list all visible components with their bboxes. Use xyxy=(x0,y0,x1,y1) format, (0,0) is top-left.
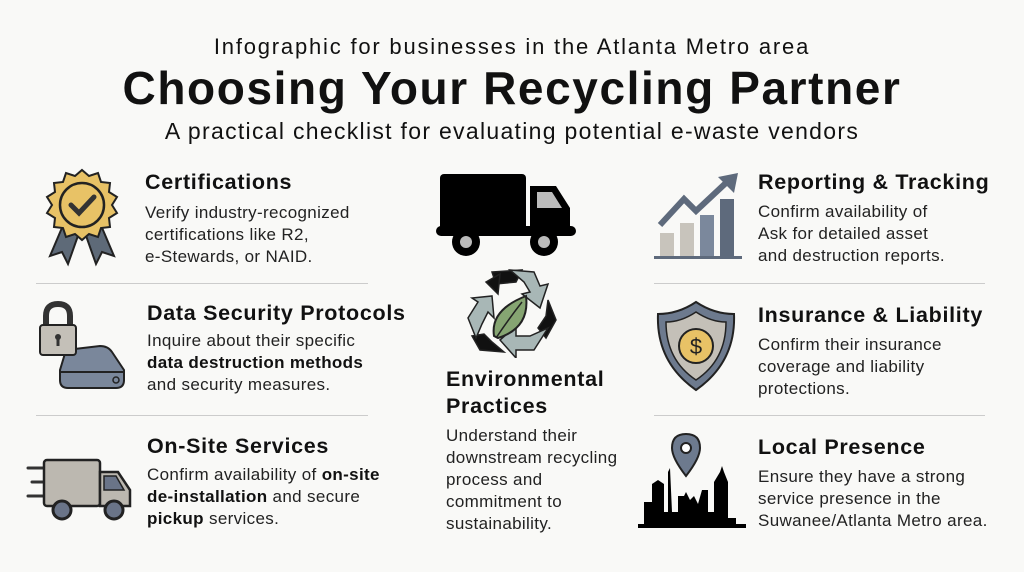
panel: on-site services xyxy=(26,434,380,528)
heading: Local Presence xyxy=(758,435,926,459)
text xyxy=(145,203,350,266)
icon: city skyline with pin xyxy=(638,433,746,528)
text: data destruction methods xyxy=(147,353,363,372)
text xyxy=(758,335,942,398)
text: service presence in the xyxy=(758,489,941,508)
text: sustainability. xyxy=(446,514,552,533)
heading: Reporting & Tracking xyxy=(758,170,989,194)
text: Inquire about their specific xyxy=(147,331,355,350)
heading: Environmental xyxy=(446,367,604,391)
text: de-installation and secure xyxy=(147,487,360,506)
text: Suwanee/Atlanta Metro area. xyxy=(758,511,988,530)
text: Ensure they have a strong xyxy=(758,467,965,486)
icon: lock and drive xyxy=(39,301,125,389)
text xyxy=(758,202,945,265)
heading xyxy=(446,367,604,418)
text: protections. xyxy=(758,379,850,398)
icon: bar chart rising xyxy=(654,173,742,259)
text: certifications like R2, xyxy=(145,225,309,244)
text: Verify industry-recognized xyxy=(145,203,350,222)
subtitle top: Infographic for businesses in the Atlanta Metro area xyxy=(214,34,810,59)
text xyxy=(758,467,988,530)
title: Choosing Your Recycling Partner xyxy=(123,62,901,114)
text: Confirm availability of on-site xyxy=(147,465,380,484)
text: Confirm their insurance xyxy=(758,335,942,354)
text: and destruction reports. xyxy=(758,246,945,265)
text: pickup services. xyxy=(147,509,279,528)
text: and security measures. xyxy=(147,375,330,394)
icon: shield with dollar: $ xyxy=(690,334,702,359)
text: downstream recycling xyxy=(446,448,617,467)
text: Confirm availability of xyxy=(758,202,928,221)
text: coverage and liability xyxy=(758,357,924,376)
panel: certifications xyxy=(46,168,350,266)
text: Understand their xyxy=(446,426,577,445)
text xyxy=(446,426,617,533)
panel: environmental practices xyxy=(446,367,617,533)
icon: recycling leaf xyxy=(467,269,557,358)
text xyxy=(147,465,380,528)
text: e-Stewards, or NAID. xyxy=(145,247,313,266)
icon: delivery truck xyxy=(436,174,576,256)
text: Ask for detailed asset xyxy=(758,224,928,243)
icon: shield with dollar xyxy=(656,300,736,392)
panel: reporting xyxy=(654,170,989,265)
text xyxy=(147,331,363,394)
text: commitment to xyxy=(446,492,562,511)
icon: award badge xyxy=(46,168,118,266)
icon: moving truck xyxy=(26,458,132,520)
text: process and xyxy=(446,470,542,489)
panel: local presence xyxy=(638,433,988,530)
heading: Insurance & Liability xyxy=(758,303,983,327)
panel: insurance xyxy=(656,300,983,398)
heading: Practices xyxy=(446,394,548,418)
heading: Data Security Protocols xyxy=(147,301,406,325)
heading: On-Site Services xyxy=(147,434,329,458)
tagline: A practical checklist for evaluating potential e-waste vendors xyxy=(165,118,859,144)
panel: data security xyxy=(39,301,406,394)
heading: Certifications xyxy=(145,170,292,194)
